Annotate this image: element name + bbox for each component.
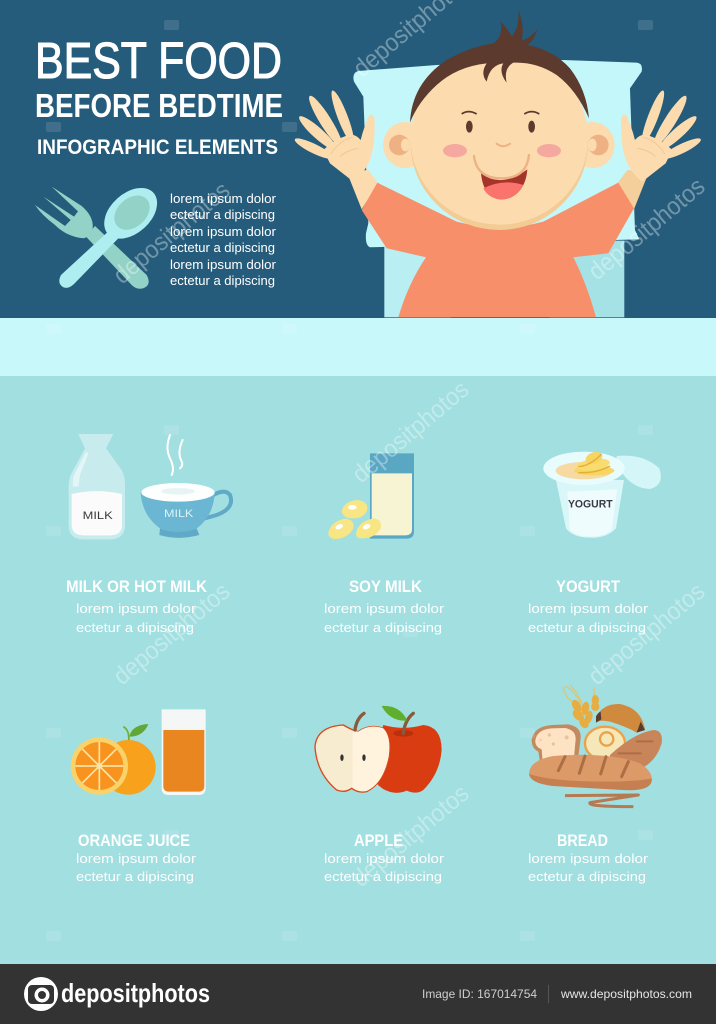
item: yogurt	[528, 450, 661, 635]
header lorem text: lorem ipsum dolor	[170, 191, 277, 206]
description: lorem ipsum dolor	[324, 851, 445, 866]
footer bar	[0, 964, 716, 1024]
description: lorem ipsum dolor	[528, 601, 649, 616]
description	[528, 851, 649, 884]
description: lorem ipsum dolor	[324, 601, 445, 616]
label: ORANGE JUICE	[78, 831, 190, 850]
description: lorem ipsum dolor	[528, 851, 649, 866]
icon: hot milk cup: MILK	[164, 508, 193, 520]
left hand	[293, 89, 375, 182]
description	[324, 851, 445, 884]
watermarks: depositphotos	[108, 577, 235, 691]
icon: camera logo	[24, 977, 58, 1011]
smiling mouth	[474, 155, 529, 199]
icon: milk bottle	[69, 434, 125, 539]
footer brand: depositphotos	[61, 978, 210, 1008]
pale divider strip	[0, 318, 716, 376]
item: apple	[315, 706, 445, 884]
pillow	[353, 60, 642, 247]
blanket right	[550, 241, 624, 317]
description: ectetur a dipiscing	[324, 620, 442, 635]
subtitle: INFOGRAPHIC ELEMENTS	[37, 136, 278, 159]
header lorem text: lorem ipsum dolor	[170, 224, 277, 239]
spoon	[59, 178, 167, 288]
description: ectetur a dipiscing	[528, 869, 646, 884]
label: APPLE	[354, 831, 403, 850]
footer url: www.depositphotos.com	[560, 987, 692, 1001]
head shadow	[411, 55, 588, 230]
description	[324, 601, 445, 635]
shirt	[362, 183, 634, 317]
label: BREAD	[557, 831, 608, 850]
description: ectetur a dipiscing	[76, 869, 194, 884]
label: SOY MILK	[349, 577, 423, 596]
title line 1: BEST FOOD	[35, 32, 282, 89]
watermarks	[108, 0, 710, 893]
item: soy milk	[324, 453, 445, 635]
face	[411, 51, 588, 225]
right forearm	[617, 170, 649, 209]
description	[76, 851, 197, 884]
left ear	[383, 122, 427, 168]
header lorem text: ectetur a dipiscing	[170, 207, 275, 222]
header panel background	[0, 0, 716, 318]
fork	[35, 187, 149, 289]
blanket left	[384, 247, 451, 317]
title line 2: BEFORE BEDTIME	[35, 87, 283, 124]
left forearm	[347, 170, 378, 209]
description: lorem ipsum dolor	[76, 851, 197, 866]
watermark camera marks	[46, 20, 653, 941]
title block	[35, 32, 283, 159]
food panel background	[0, 376, 716, 964]
icon: soy milk glass and beans	[328, 453, 414, 539]
right ear	[571, 122, 615, 168]
image id: Image ID: 167014754	[422, 987, 537, 1001]
header lorem text	[170, 191, 277, 288]
icon: bread assortment	[529, 685, 662, 807]
hair	[410, 10, 589, 123]
description	[528, 601, 649, 635]
item: milk	[66, 434, 231, 635]
header lorem text: ectetur a dipiscing	[170, 240, 275, 255]
item: orange juice	[71, 709, 206, 884]
icon: apples	[315, 706, 442, 793]
label: MILK OR HOT MILK	[66, 577, 208, 596]
description	[76, 601, 197, 635]
item: bread	[528, 685, 662, 884]
description: ectetur a dipiscing	[76, 620, 194, 635]
label: YOGURT	[556, 577, 621, 596]
description: lorem ipsum dolor	[76, 601, 197, 616]
right hand	[621, 89, 703, 182]
eyes	[462, 112, 539, 133]
icon: fork and spoon	[35, 178, 167, 289]
watermarks: depositphotos	[108, 176, 235, 290]
watermarks: depositphotos	[347, 779, 474, 893]
description: ectetur a dipiscing	[528, 620, 646, 635]
watermarks: depositphotos	[347, 375, 474, 489]
icon: yogurt cup	[543, 450, 661, 538]
icon: orange and juice	[71, 709, 206, 795]
illustration: child in bed	[293, 10, 703, 317]
cheeks	[443, 144, 561, 157]
header lorem text: ectetur a dipiscing	[170, 273, 275, 288]
header lorem text: lorem ipsum dolor	[170, 257, 277, 272]
icon: milk bottle: MILK	[83, 510, 113, 522]
icon: hot milk cup	[141, 435, 231, 538]
icon: yogurt cup: YOGURT	[568, 499, 613, 511]
description: ectetur a dipiscing	[324, 869, 442, 884]
nose	[497, 144, 510, 146]
